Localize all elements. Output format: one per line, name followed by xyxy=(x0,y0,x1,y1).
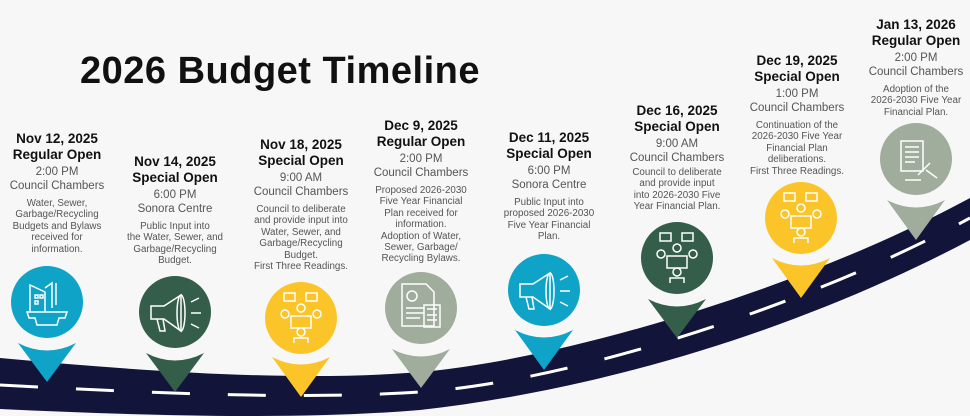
column 1: Nov 12, 2025 xyxy=(16,131,98,146)
pin 7 xyxy=(765,182,837,298)
pin 2 xyxy=(139,276,211,392)
column 6: into 2026-2030 Five xyxy=(634,190,720,201)
pin 1 xyxy=(11,266,83,382)
pin 8 xyxy=(880,123,952,240)
column 3: and provide input into xyxy=(254,215,348,226)
column 7: deliberations. xyxy=(768,154,826,165)
column 3: Budget. xyxy=(284,250,318,261)
column 6: Special Open xyxy=(634,119,720,134)
column 2: Sonora Centre xyxy=(138,202,212,214)
column 7: Financial Plan xyxy=(766,143,828,154)
column 1: Budgets and Bylaws xyxy=(13,221,101,232)
column 4: Council Chambers xyxy=(374,166,468,178)
pin 5 xyxy=(508,254,580,370)
column 8: Adoption of the xyxy=(883,84,949,95)
pin 4 xyxy=(385,272,457,388)
column 6: and provide input xyxy=(639,178,715,189)
column 6: Council to deliberate xyxy=(632,167,722,178)
column 7: Continuation of the xyxy=(756,120,838,131)
column 6 xyxy=(630,103,724,212)
column 7: First Three Readings. xyxy=(750,166,844,177)
column 4: Recycling Bylaws. xyxy=(382,253,460,264)
column 6: Dec 16, 2025 xyxy=(636,103,718,118)
column 5: Five Year Financial xyxy=(508,220,590,231)
column 1: Council Chambers xyxy=(10,180,104,192)
column 7: Dec 19, 2025 xyxy=(756,53,838,68)
column 4: Proposed 2026-2030 xyxy=(375,185,467,196)
column 4 xyxy=(374,118,468,264)
column 7: Special Open xyxy=(754,69,840,84)
column 2 xyxy=(127,154,223,266)
column 6: 9:00 AM xyxy=(656,138,698,150)
column 4: Dec 9, 2025 xyxy=(384,118,458,133)
column 2: 6:00 PM xyxy=(154,189,196,201)
column 6: Year Financial Plan. xyxy=(634,201,720,212)
column 7: Council Chambers xyxy=(750,102,844,114)
column 8: Council Chambers xyxy=(869,66,963,78)
column 2: the Water, Sewer, and xyxy=(127,232,223,243)
road xyxy=(0,198,970,416)
column 2: Budget. xyxy=(158,255,192,266)
title: 2026 Budget Timeline xyxy=(80,50,480,92)
column 5: Plan. xyxy=(538,231,560,242)
column 3: Nov 18, 2025 xyxy=(260,137,342,152)
column 4: 2:00 PM xyxy=(400,153,442,165)
column 3: Council Chambers xyxy=(254,186,348,198)
column 8: Regular Open xyxy=(872,33,960,48)
column 1: Regular Open xyxy=(13,147,101,162)
column 2: Special Open xyxy=(132,170,218,185)
column 8 xyxy=(869,17,963,118)
column 4: Adoption of Water, xyxy=(381,231,461,242)
column 3: Council to deliberate xyxy=(256,204,346,215)
column 5 xyxy=(504,130,594,242)
column 5: Special Open xyxy=(506,146,592,161)
column 5: 6:00 PM xyxy=(528,165,570,177)
column 2: Garbage/Recycling xyxy=(133,244,217,255)
column 3: Garbage/Recycling xyxy=(259,238,343,249)
column 2: Public Input into xyxy=(140,221,210,232)
pin 3 xyxy=(265,282,337,397)
column 1: information. xyxy=(31,244,83,255)
column 7 xyxy=(750,53,844,177)
pin 6 xyxy=(641,222,713,338)
column 8: 2:00 PM xyxy=(895,52,937,64)
column 5: proposed 2026-2030 xyxy=(504,208,594,219)
column 1: received for xyxy=(31,232,83,243)
column 4: Regular Open xyxy=(377,134,465,149)
column 1 xyxy=(10,131,104,255)
column 5: Sonora Centre xyxy=(512,178,586,190)
column 5: Public Input into xyxy=(514,197,584,208)
column 1: Water, Sewer, xyxy=(27,198,87,209)
column 8: 2026-2030 Five Year xyxy=(871,95,961,106)
column 8: Jan 13, 2026 xyxy=(876,17,956,32)
column 1: Garbage/Recycling xyxy=(15,209,99,220)
column 6: Council Chambers xyxy=(630,152,724,164)
column 3: Special Open xyxy=(258,153,344,168)
column 3 xyxy=(254,137,348,272)
column 5: Dec 11, 2025 xyxy=(509,130,589,145)
column 7: 1:00 PM xyxy=(776,88,818,100)
column 7: 2026-2030 Five Year xyxy=(752,131,842,142)
column 4: information. xyxy=(395,219,447,230)
column 3: 9:00 AM xyxy=(280,172,322,184)
column 3: Water, Sewer, and xyxy=(261,227,341,238)
column 3: First Three Readings. xyxy=(254,261,348,272)
column 8: Financial Plan. xyxy=(884,107,948,118)
column 2: Nov 14, 2025 xyxy=(134,154,216,169)
column 4: Five Year Financial xyxy=(380,196,462,207)
column 1: 2:00 PM xyxy=(36,166,78,178)
column 4: Sewer, Garbage/ xyxy=(384,242,458,253)
column 4: Plan received for xyxy=(384,208,458,219)
